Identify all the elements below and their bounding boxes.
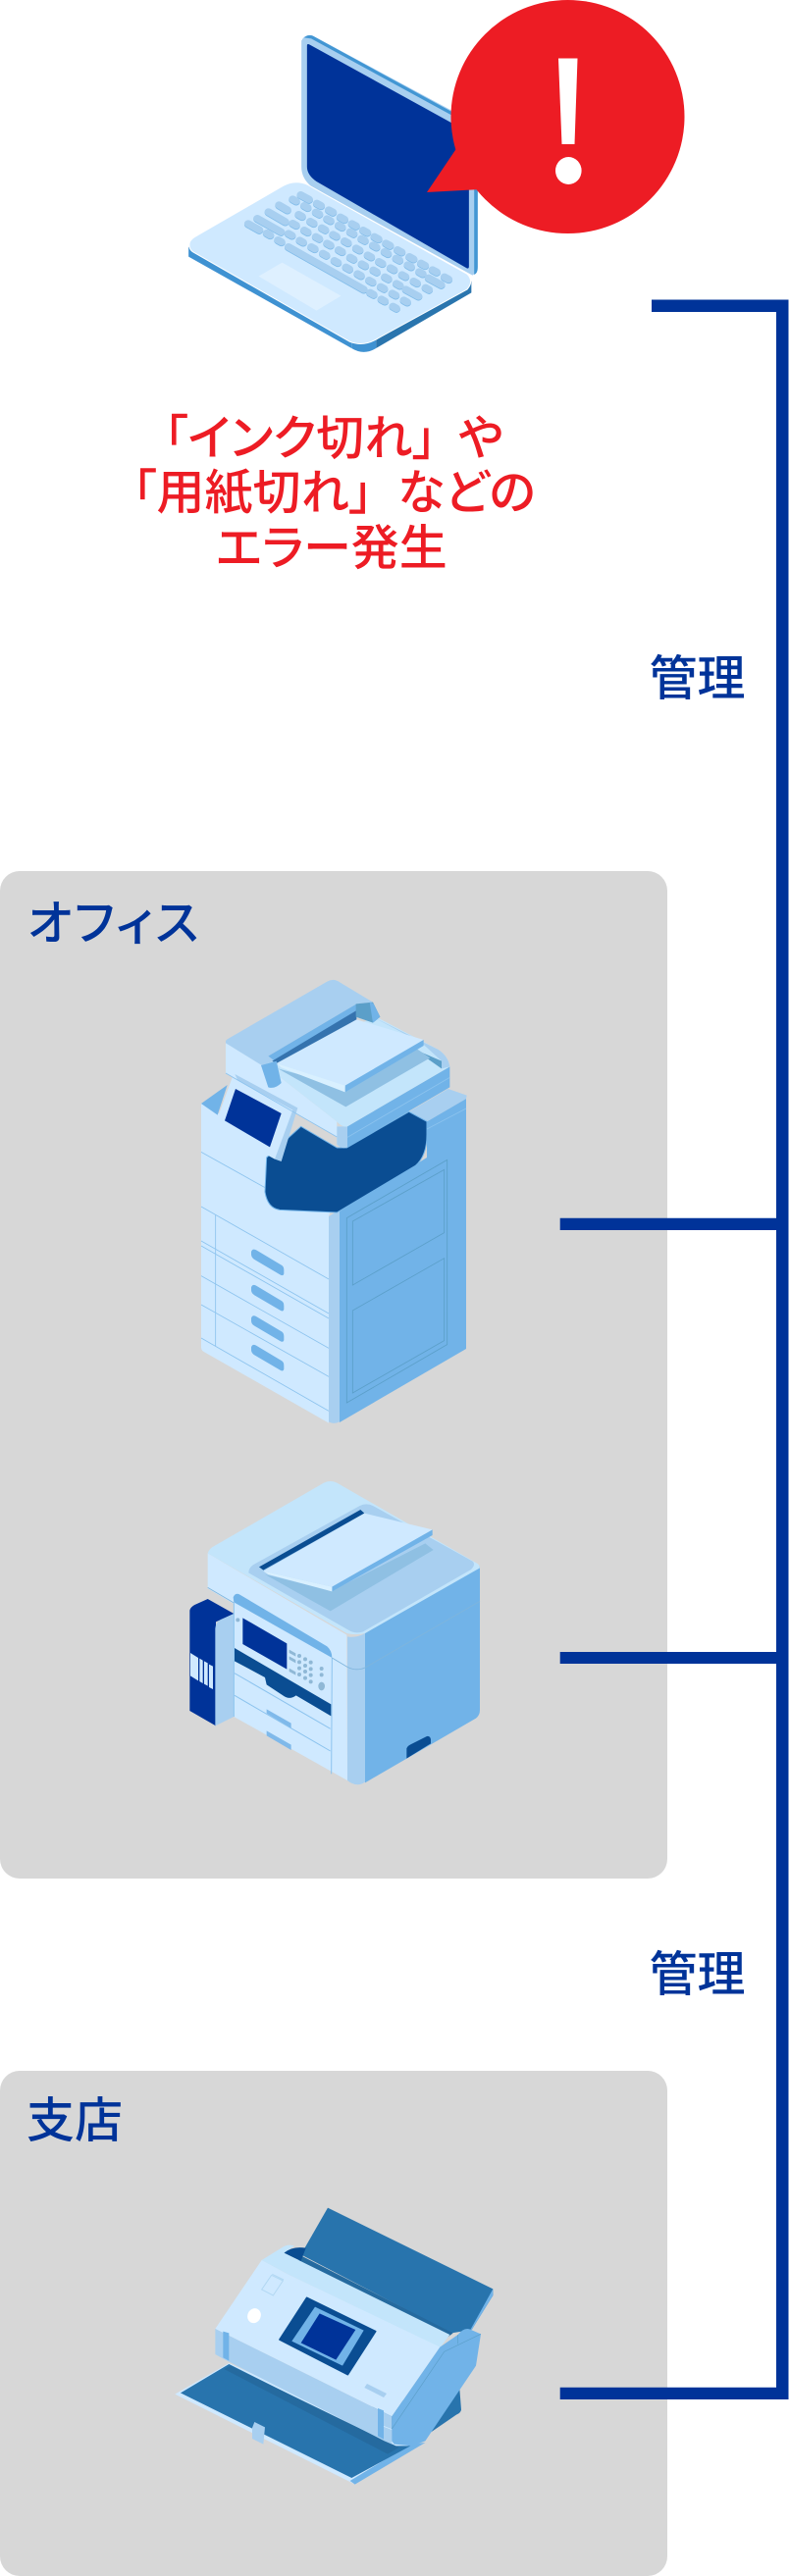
icon: document scanner [175, 2208, 493, 2485]
label: management 2: 管理 [649, 1948, 746, 2001]
icon: large copier [201, 980, 467, 1423]
panel: office [0, 871, 667, 1879]
label: branch: 支店 [26, 2095, 123, 2148]
heading: error message: 「インク切れ」 [164, 412, 437, 465]
heading: error message: エラー発生 [216, 522, 447, 575]
connector: management bracket [560, 300, 789, 2399]
icon: multifunction printer [189, 1481, 480, 1784]
panel: branch [0, 2071, 667, 2576]
heading: error message: などの [397, 467, 536, 520]
label: management 1: 管理 [649, 653, 746, 706]
icon: red alert speech bubble [427, 0, 685, 233]
heading: error message: 「用紙切れ」 [132, 467, 373, 520]
heading: error message: や [458, 412, 503, 465]
icon: laptop [188, 35, 478, 352]
label: office: オフィス [27, 898, 201, 951]
